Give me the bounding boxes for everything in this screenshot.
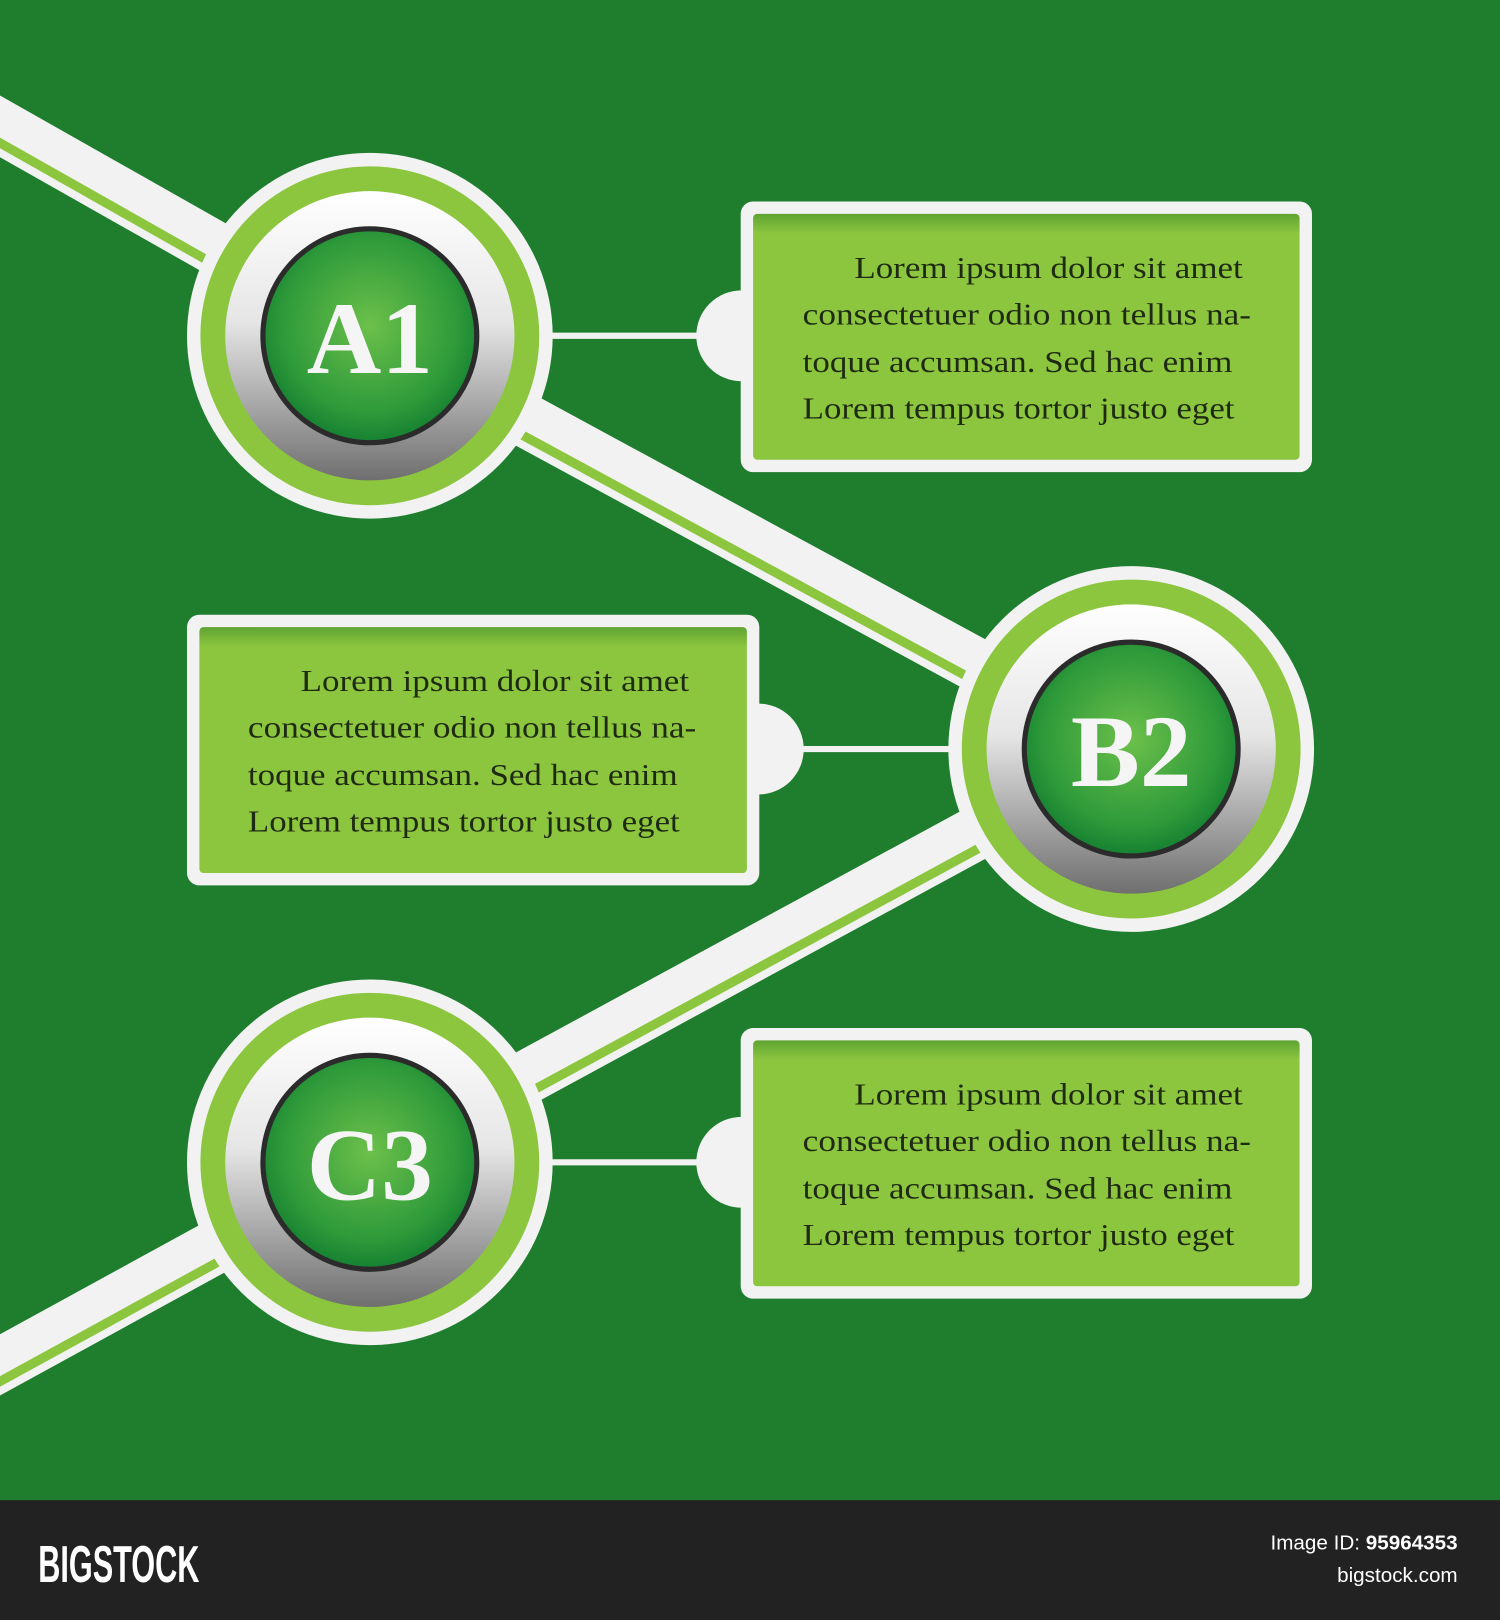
text box A1: Lorem tempus tortor justo eget: [803, 390, 1235, 425]
circle B2: B2: [1071, 695, 1191, 809]
text box C3: [741, 1028, 1312, 1299]
text box B2: [187, 615, 759, 885]
text box A1: toque accumsan. Sed hac enim: [803, 344, 1232, 379]
connector C3: [537, 1117, 787, 1208]
circle B2: [948, 566, 1314, 932]
text box B2: toque accumsan. Sed hac enim: [248, 757, 678, 792]
circle C3: [187, 979, 553, 1345]
circle A1: [187, 153, 553, 519]
connector B2: [713, 704, 961, 795]
text box A1: consectetuer odio non tellus na-: [803, 296, 1251, 331]
footer bar: Image ID: 95964353: [1270, 1532, 1458, 1555]
footer bar: bigstock.com: [1337, 1564, 1458, 1587]
connector A1: [537, 290, 787, 381]
text box C3: Lorem tempus tortor justo eget: [803, 1217, 1235, 1252]
footer bar: [0, 1500, 1500, 1620]
text box A1: [741, 201, 1312, 472]
text box B2: Lorem tempus tortor justo eget: [248, 804, 680, 839]
footer bar: BIGSTOCK: [38, 1535, 199, 1593]
text box B2: consectetuer odio non tellus na-: [248, 710, 696, 745]
diagonal band path: [0, 115, 1131, 1393]
circle A1: A1: [307, 282, 433, 396]
text box C3: toque accumsan. Sed hac enim: [803, 1170, 1232, 1205]
text box B2: Lorem ipsum dolor sit amet: [301, 663, 689, 698]
text box C3: consectetuer odio non tellus na-: [803, 1123, 1251, 1158]
circle C3: C3: [307, 1108, 433, 1223]
text box C3: Lorem ipsum dolor sit amet: [854, 1076, 1243, 1111]
text box A1: Lorem ipsum dolor sit amet: [854, 250, 1243, 285]
